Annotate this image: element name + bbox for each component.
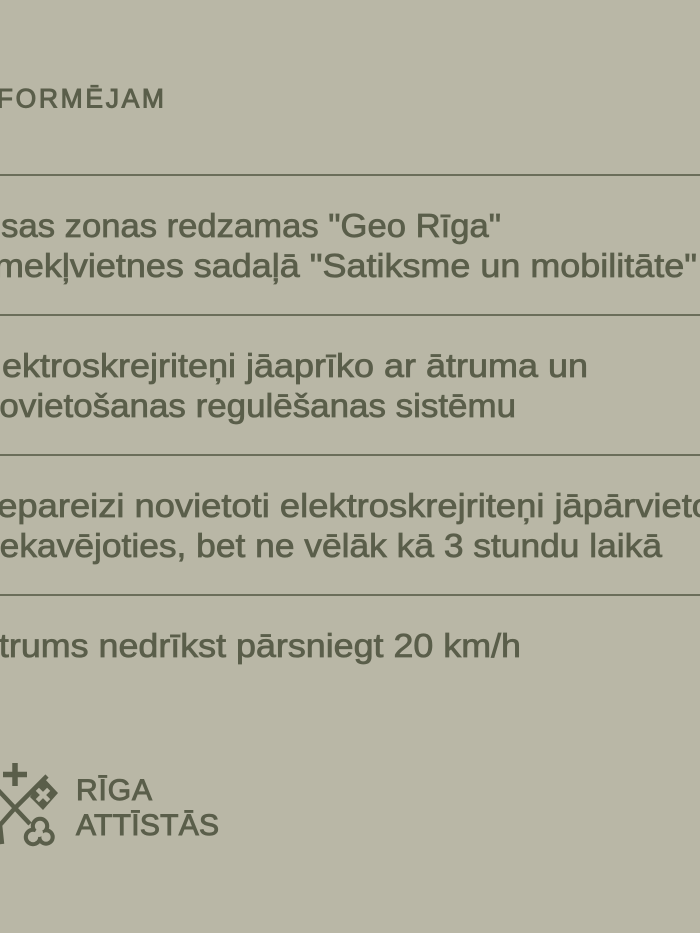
logo wordmark: RĪGA <box>76 774 152 807</box>
text block: relocation <box>0 487 700 564</box>
icon: cross <box>3 763 27 786</box>
logo icon: crossed keys <box>0 763 58 844</box>
logo wordmark <box>76 774 219 842</box>
text block: equipment <box>0 347 588 424</box>
logo wordmark: ATTĪSTĀS <box>76 809 219 842</box>
text block: zones <box>0 207 697 284</box>
